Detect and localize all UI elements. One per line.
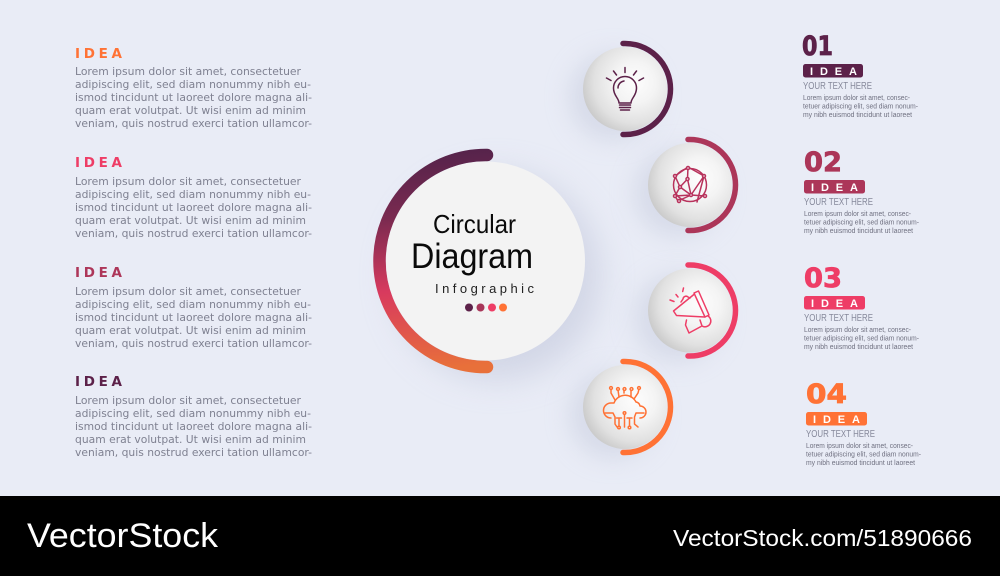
text block: idea 2: IDEA [75, 155, 123, 171]
item 02: my nibh euismod tincidunt ut laoreet [804, 228, 913, 235]
badge: IDEA [810, 66, 857, 78]
item 04: my nibh euismod tincidunt ut laoreet [806, 460, 915, 467]
text block: idea 2: veniam, quis nostrud exerci tation ullamcor- [75, 228, 312, 240]
text block: idea 2: Lorem ipsum dolor sit amet, consectetuer [75, 176, 302, 188]
item 02 [804, 147, 920, 235]
text block: idea 2: adipiscing elit, sed diam nonummy nibh eu- [75, 189, 311, 201]
text block: idea 3: veniam, quis nostrud exerci tation ullamcor- [75, 338, 312, 350]
item 04: YOUR TEXT HERE [806, 429, 875, 440]
text block: idea 4: veniam, quis nostrud exerci tation ullamcor- [75, 447, 312, 459]
text block: idea 1 [75, 46, 312, 130]
item 03: YOUR TEXT HERE [804, 313, 873, 324]
text block: idea 4: ismod tincidunt ut laoreet dolore magna ali- [75, 421, 312, 433]
text block: idea 1: ismod tincidunt ut laoreet dolore magna ali- [75, 92, 312, 104]
item 04 [806, 379, 922, 467]
text block: idea 3: quam erat volutpat. Ut wisi enim ad minim [75, 325, 306, 337]
item 03: tetuer adipiscing elit, sed diam nonum- [804, 336, 920, 342]
item 01: Lorem ipsum dolor sit amet, consec- [803, 95, 911, 102]
node 3: megaphone [634, 265, 736, 362]
icon: network globe [674, 166, 706, 202]
colour dots [465, 304, 507, 312]
subheading: Infographic: Infographic [435, 281, 534, 296]
number 04: 04 [806, 379, 847, 410]
text block: idea 4 [75, 374, 312, 459]
text block: idea 1: veniam, quis nostrud exerci tation ullamcor- [75, 118, 312, 130]
text block: idea 1: IDEA [75, 46, 123, 62]
text block: idea 3: IDEA [75, 265, 123, 281]
text block: idea 1: Lorem ipsum dolor sit amet, consectetuer [75, 66, 302, 78]
item 01 [802, 31, 919, 119]
text block: idea 3: Lorem ipsum dolor sit amet, consectetuer [75, 286, 302, 298]
badge: IDEA [811, 182, 858, 194]
icon: lightbulb [606, 68, 644, 110]
text block: idea 4: adipiscing elit, sed diam nonummy nibh eu- [75, 408, 311, 420]
node 1: lightbulb [569, 43, 671, 141]
text block: idea 2 [75, 155, 312, 240]
node 2: network globe [634, 139, 736, 237]
badge: IDEA [813, 414, 860, 426]
text block: idea 2: ismod tincidunt ut laoreet dolore magna ali- [75, 202, 312, 214]
text block: idea 3 [75, 265, 312, 350]
text block: idea 4: IDEA [75, 374, 123, 390]
item 04: Lorem ipsum dolor sit amet, consec- [806, 443, 914, 450]
item 01: my nibh euismod tincidunt ut laoreet [803, 112, 912, 119]
footer url: VectorStock.com/51890666 [673, 525, 972, 551]
item 03 [804, 263, 920, 351]
footer logo: VectorStock [27, 517, 219, 555]
heading: Diagram: Diagram [411, 237, 533, 276]
text block: idea 1: adipiscing elit, sed diam nonummy nibh eu- [75, 79, 311, 91]
node 4: cloud circuit [569, 361, 671, 459]
icon: cloud circuit [604, 387, 646, 429]
footer bar [0, 496, 1000, 576]
text block: idea 1: quam erat volutpat. Ut wisi enim ad minim [75, 105, 306, 117]
text block: idea 2: quam erat volutpat. Ut wisi enim ad minim [75, 215, 306, 227]
item 02: tetuer adipiscing elit, sed diam nonum- [804, 220, 920, 226]
icon: megaphone [670, 288, 711, 333]
text block: idea 4: Lorem ipsum dolor sit amet, consectetuer [75, 395, 302, 407]
item 03: my nibh euismod tincidunt ut laoreet [804, 344, 913, 351]
gradient arc [380, 155, 487, 367]
central circular diagram [380, 155, 601, 380]
central disc [386, 162, 585, 360]
item 01: YOUR TEXT HERE [803, 81, 872, 92]
panel: left text column [75, 46, 312, 459]
text block: idea 3: ismod tincidunt ut laoreet dolore magna ali- [75, 312, 312, 324]
item 03: Lorem ipsum dolor sit amet, consec- [804, 327, 912, 334]
panel: right column [802, 31, 922, 467]
number 01: 01 [802, 31, 833, 62]
number 03: 03 [804, 263, 842, 294]
item 01: tetuer adipiscing elit, sed diam nonum- [803, 104, 919, 110]
number 02: 02 [804, 147, 842, 178]
badge: IDEA [811, 298, 858, 310]
text block: idea 4: quam erat volutpat. Ut wisi enim ad minim [75, 434, 306, 446]
item 02: Lorem ipsum dolor sit amet, consec- [804, 211, 912, 218]
heading: Circular: Circular [433, 209, 516, 239]
text block: idea 3: adipiscing elit, sed diam nonummy nibh eu- [75, 299, 311, 311]
item 02: YOUR TEXT HERE [804, 197, 873, 208]
item 04: tetuer adipiscing elit, sed diam nonum- [806, 452, 922, 458]
